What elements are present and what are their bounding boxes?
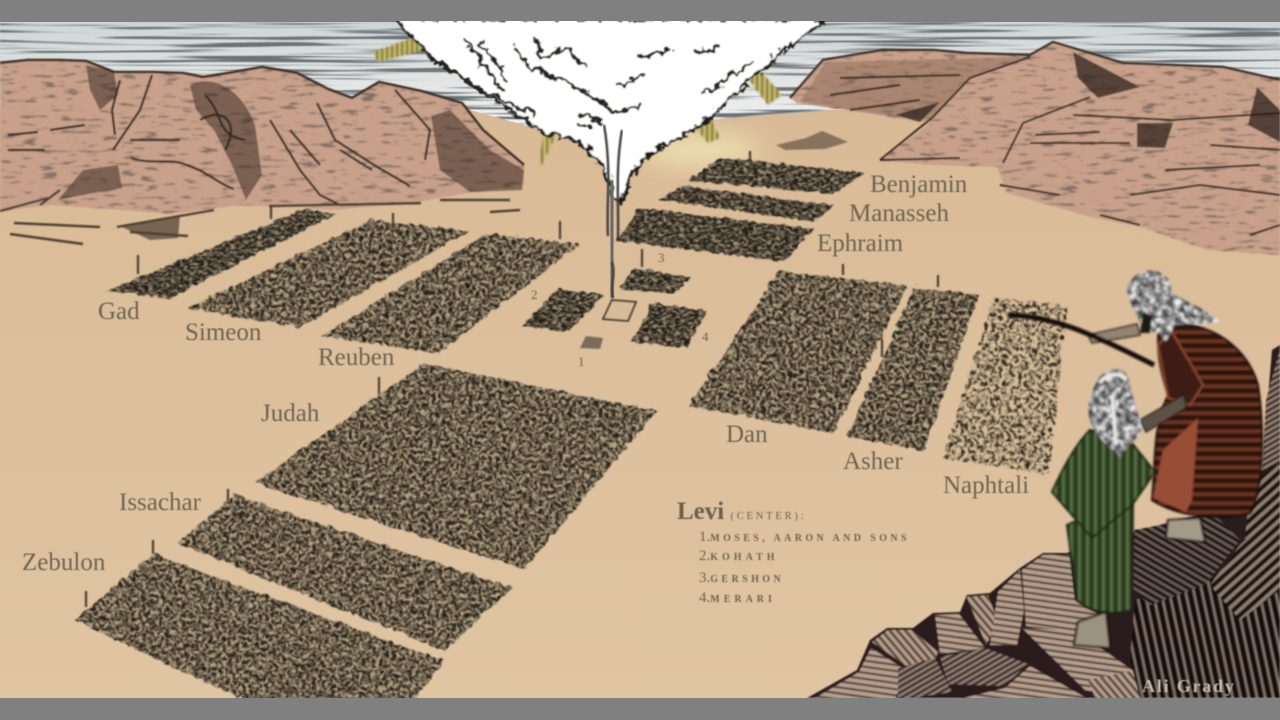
cloud body (393, 16, 823, 200)
lower robe front (1153, 418, 1198, 512)
label: Dan: Dan (726, 421, 768, 448)
hair highlight (1100, 375, 1126, 445)
light glow under cloud (640, 132, 760, 168)
head and hair (1088, 369, 1142, 458)
crag lines (830, 57, 1280, 235)
label: Gad: Gad (98, 298, 140, 325)
bottom frame (0, 698, 1280, 720)
upper ridge shading (800, 57, 1030, 120)
arm (1088, 324, 1140, 343)
tribe labels (22, 171, 1029, 576)
number 1: 1 (578, 354, 584, 369)
staff (1008, 315, 1154, 365)
rock silhouette (807, 345, 1280, 698)
label: Issachar: Issachar (119, 489, 202, 516)
camp: Asher (845, 286, 977, 449)
camp: Judah (252, 361, 655, 567)
legend: Levi center (677, 498, 910, 606)
label: Naphtali: Naphtali (943, 472, 1029, 499)
tabernacle (603, 300, 636, 321)
legend item 3: 3.GERSHON (699, 570, 784, 586)
stem shadow (611, 180, 613, 298)
rock patches light (872, 630, 938, 672)
foothill scratches (0, 190, 520, 244)
number 4: 4 (702, 329, 709, 344)
feet (1074, 612, 1110, 648)
label: Manasseh: Manasseh (849, 200, 949, 227)
west label smudge (776, 131, 848, 150)
number 3: 3 (658, 250, 664, 265)
hair (1158, 290, 1222, 342)
feet (1166, 518, 1205, 542)
camp: Ephraim (615, 206, 812, 260)
mountains left (0, 60, 524, 244)
label: Zebulon: Zebulon (22, 549, 106, 576)
robe (1152, 324, 1262, 517)
camp: Reuben (319, 232, 577, 351)
camp: Gad (105, 208, 335, 297)
figure: boy (1052, 369, 1186, 648)
number 2: 2 (531, 287, 538, 302)
dark crag shapes (58, 65, 524, 200)
foreground rock (807, 345, 1280, 700)
storm lines (423, 35, 753, 125)
camp: Levi 4 Merari (629, 302, 705, 346)
rock right stripes (1130, 560, 1280, 698)
camp: Manasseh (657, 184, 832, 220)
ridge lines (8, 75, 430, 205)
camp: Moses and Aaron (580, 336, 603, 349)
green cape (1052, 430, 1155, 538)
mountains right (790, 42, 1280, 255)
foothill dark bush (120, 215, 180, 240)
legend item 4: 4.MERARI (699, 590, 776, 606)
tribal standards (86, 151, 938, 607)
camp: Dan (687, 269, 905, 431)
camp: Issachar (175, 493, 510, 649)
label: Judah: Judah (261, 400, 320, 427)
right ridge outline (790, 42, 1280, 98)
beard (1140, 312, 1152, 333)
camp: Simeon (185, 218, 467, 326)
head (1127, 270, 1172, 342)
label: Benjamin: Benjamin (870, 171, 968, 198)
dark crags (895, 52, 1280, 148)
lower green robe (1067, 495, 1133, 613)
figure: Moses (1008, 270, 1262, 542)
stem inner lines (604, 125, 622, 298)
robe sleeve (1158, 332, 1203, 405)
label: Reuben: Reuben (318, 344, 395, 371)
camp: Levi 2 Kohath (520, 287, 602, 330)
legend item 2: 2.KOHATH (699, 548, 779, 564)
label: Asher: Asher (843, 448, 903, 475)
rays of light (373, 33, 782, 172)
legend item 1: 1.MOSES, AARON AND SONS (699, 529, 910, 545)
legend title: Levi (CENTER): (677, 498, 806, 525)
camp: Naphtali (940, 295, 1065, 473)
label: Simeon: Simeon (185, 319, 262, 346)
pillar of cloud (393, 16, 823, 298)
left ridge outline (0, 60, 524, 165)
label: Ephraim: Ephraim (817, 230, 904, 257)
camps (72, 151, 1065, 701)
top frame (0, 0, 1280, 21)
camp: Levi 3 Gershon (617, 266, 689, 292)
signature: Ali Grady (1142, 676, 1236, 696)
forearm (1140, 395, 1186, 432)
Levi section numbers (531, 250, 709, 369)
camp: Zebulon (72, 552, 442, 701)
sea and sky (0, 22, 1280, 135)
camp: Benjamin (687, 156, 862, 192)
